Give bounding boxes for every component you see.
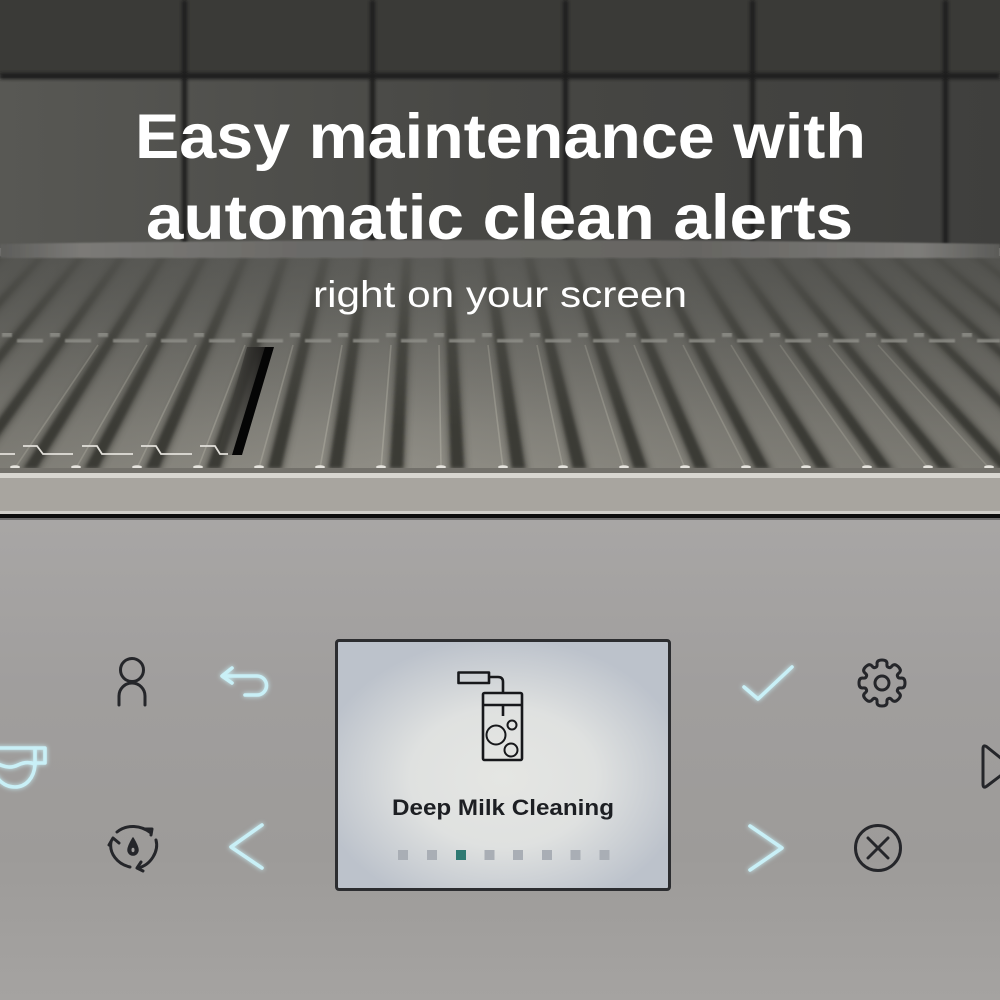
- rib end dots: [10, 465, 994, 469]
- icon: left chevron: [231, 825, 262, 868]
- icon: back arrow: [222, 668, 266, 695]
- title: [135, 102, 866, 253]
- title: Easy maintenance with: [135, 102, 866, 172]
- icon: settings gear: [859, 660, 905, 706]
- screen label: Deep Milk Cleaning: [392, 795, 614, 820]
- grill cross step: [2, 334, 1000, 342]
- grill rib highlights: [15, 345, 989, 468]
- grill side shading: [0, 256, 1000, 468]
- page indicator dots: [398, 850, 610, 860]
- icon: right chevron: [750, 826, 782, 870]
- icon: coffee cup: [0, 748, 45, 787]
- icon: user profile: [119, 658, 145, 705]
- tray front edge: [0, 468, 1000, 520]
- icon: rinse cycle: [109, 826, 157, 871]
- tray back lip: [0, 240, 1000, 258]
- grill grooves: [0, 258, 1000, 468]
- grill groove shadows: [0, 258, 1000, 468]
- icon: cancel: [856, 826, 900, 870]
- background: tiled wall: [0, 0, 1000, 248]
- screen frame: [336, 640, 670, 890]
- subtitle: right on your screen: [313, 274, 687, 315]
- grill depth fade: [0, 258, 1000, 468]
- screen: [336, 640, 670, 890]
- drip tray grill: [0, 256, 1000, 469]
- icon: play: [983, 746, 1000, 787]
- title: automatic clean alerts: [146, 183, 853, 253]
- icon: milk cleaning container: [458, 672, 522, 760]
- machine control panel: [0, 520, 1000, 1000]
- icon: check mark: [744, 667, 792, 699]
- slot in the grill: [217, 347, 274, 455]
- front step highlights: [0, 446, 228, 454]
